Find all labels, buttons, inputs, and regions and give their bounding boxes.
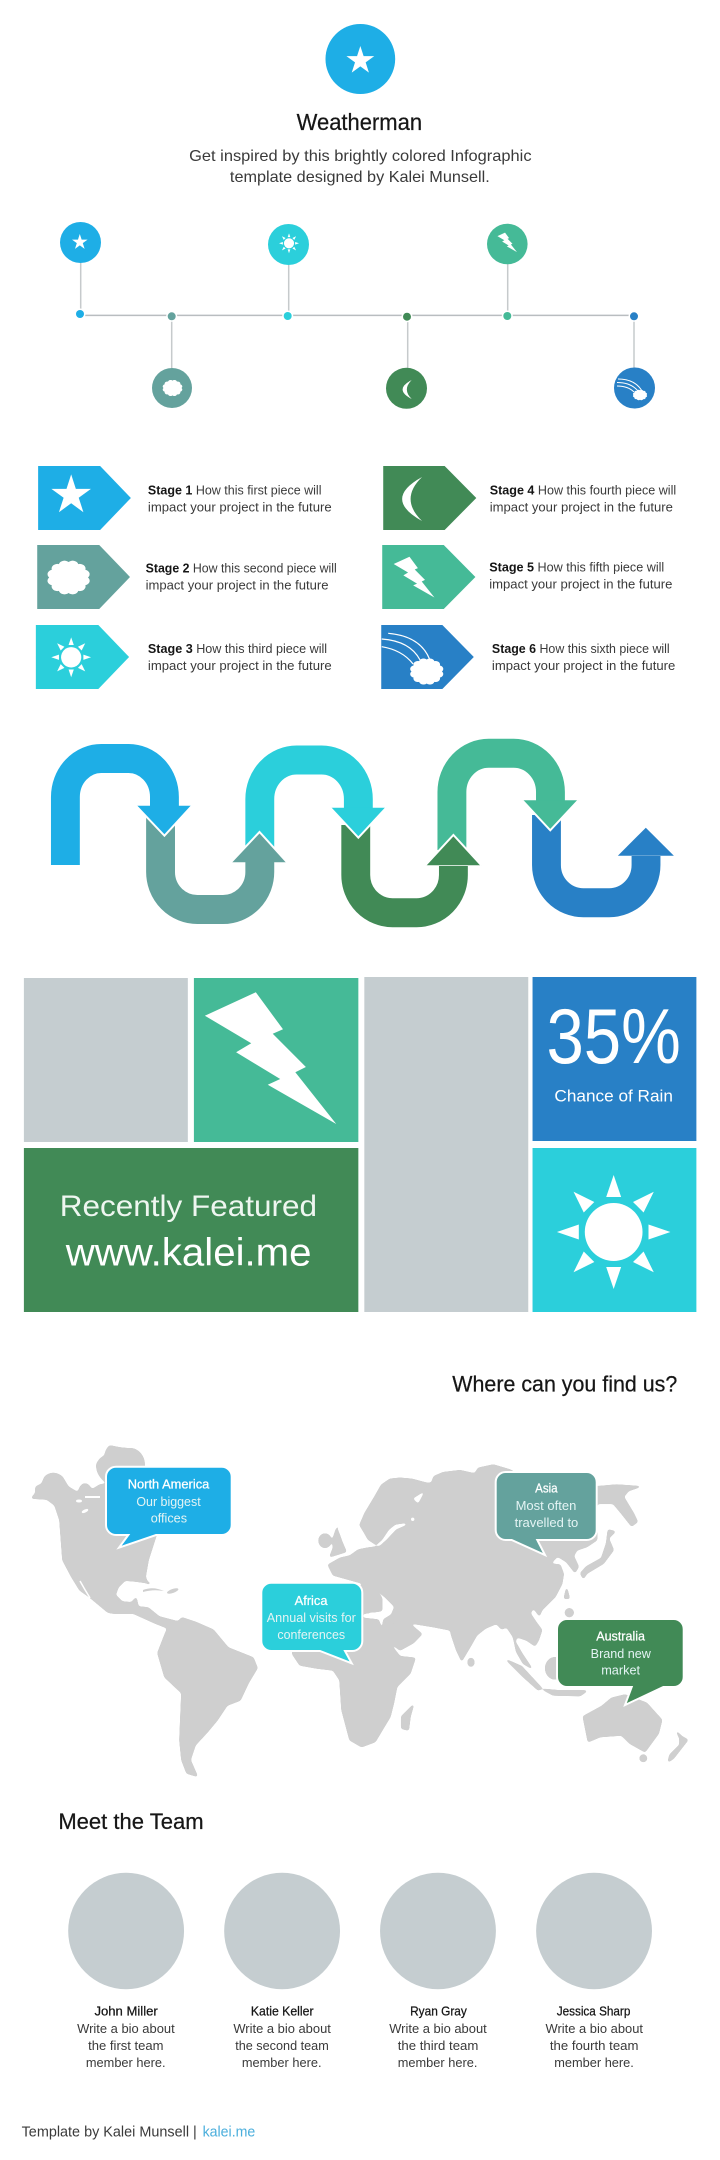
- timeline icon: moon: [386, 368, 427, 409]
- callout: Australia: Australia: [596, 1629, 646, 1644]
- team member: Ryan Gray: member here.: [398, 2056, 477, 2070]
- timeline icon: lightning: [487, 224, 528, 264]
- team member: Katie Keller: Katie Keller: [251, 2005, 314, 2019]
- map: Americas: [32, 1474, 257, 1776]
- panel: stage 5: [382, 545, 672, 609]
- panel: stage 4: [383, 466, 676, 530]
- map: Greenland: [97, 1446, 144, 1482]
- timeline icon: cloud: [152, 368, 192, 408]
- timeline: [60, 222, 655, 409]
- callout: Asia: Most often: [516, 1499, 576, 1513]
- heading: meet the team: Meet the Team: [58, 1809, 204, 1834]
- team member: Ryan Gray: [380, 1873, 496, 2070]
- team member: Jessica Sharp: Jessica Sharp: [557, 2005, 630, 2019]
- intro text: Get inspired by this brightly colored Infographic: [189, 148, 532, 165]
- team member: John Miller: the first team: [88, 2039, 164, 2053]
- header icon: star badge: [325, 24, 395, 94]
- team member: Jessica Sharp: Write a bio about: [545, 2022, 644, 2036]
- panel: stage 1: Stage 1 How this first piece will: [148, 483, 322, 498]
- panel: stage 1: impact your project in the future: [148, 500, 332, 514]
- timeline icon: sun: [268, 224, 309, 265]
- team member: Jessica Sharp: the fourth team: [550, 2039, 638, 2053]
- team member: John Miller: member here.: [86, 2056, 166, 2070]
- map: water details: [76, 1497, 414, 1616]
- callout: Africa: [261, 1583, 362, 1663]
- mosaic: chance of rain tile: Chance of Rain: [554, 1087, 673, 1106]
- team member: Ryan Gray: Ryan Gray: [410, 2005, 468, 2019]
- callout: Australia: [557, 1619, 684, 1705]
- title: Weatherman: [297, 109, 422, 135]
- timeline dot 5: [503, 312, 511, 320]
- panel: stage 2: [37, 545, 337, 609]
- arrow 3: cyan: [260, 760, 386, 850]
- timeline icon: comet: [614, 368, 655, 408]
- team member: John Miller: [68, 1873, 184, 2070]
- map: Caribbean islands: [143, 1587, 179, 1595]
- panel: stage 6: [381, 625, 675, 689]
- panel: stage 6: Stage 6 How this sixth piece will: [492, 642, 670, 656]
- serpentine arrow chain: [65, 753, 674, 913]
- mosaic: sun tile: [533, 1148, 696, 1312]
- callout: Asia: Asia: [535, 1480, 558, 1495]
- map: Eurasia and Oceania: [293, 1465, 688, 1762]
- arrow 6: deep blue: [546, 815, 674, 903]
- intro text: [189, 148, 532, 186]
- mosaic: recently featured tile: Recently Featured: [60, 1190, 317, 1223]
- intro text: template designed by Kalei Munsell.: [230, 169, 490, 186]
- team member: Ryan Gray: the third team: [398, 2039, 478, 2053]
- arrow 2: teal: [161, 812, 287, 910]
- panel: stage 2: impact your project in the future: [146, 579, 329, 593]
- mosaic: chance of rain tile: 35%: [546, 994, 681, 1080]
- team member: Katie Keller: member here.: [242, 2056, 322, 2070]
- arrow 1: blue: [65, 758, 192, 865]
- footer credit: kalei.me: [203, 2125, 255, 2141]
- team member: Katie Keller: [224, 1873, 340, 2070]
- heading: where can you find us: Where can you find us?: [452, 1372, 677, 1397]
- panel: stage 4: impact your project in the future: [490, 500, 673, 514]
- mosaic: image placeholder left: [24, 978, 188, 1142]
- timeline dot 1: [76, 310, 84, 318]
- team member: John Miller: John Miller: [94, 2005, 158, 2019]
- mosaic: image placeholder tall: [364, 977, 528, 1312]
- team member: Katie Keller: the second team: [235, 2039, 329, 2053]
- callout: Africa: Annual visits for: [267, 1611, 356, 1625]
- panel: stage 3: [36, 625, 332, 689]
- team member: Ryan Gray: Write a bio about: [389, 2022, 487, 2036]
- arrow 5: mint: [452, 753, 578, 850]
- callout: North America: [106, 1467, 232, 1548]
- timeline icon: star: [60, 222, 101, 263]
- panel: stage 2: Stage 2 How this second piece will: [146, 561, 337, 575]
- panel: stage 3: impact your project in the future: [148, 659, 332, 673]
- callout: North America: North America: [128, 1477, 210, 1492]
- callout: Asia: travelled to: [515, 1516, 578, 1530]
- callout: Asia: [496, 1472, 597, 1555]
- timeline dot 4: [403, 313, 411, 321]
- panel: stage 5: impact your project in the future: [489, 578, 672, 592]
- panel: stage 5: Stage 5 How this fifth piece will: [489, 561, 664, 575]
- team member: John Miller: Write a bio about: [77, 2022, 175, 2036]
- team member: Jessica Sharp: [536, 1873, 652, 2070]
- callout: North America: Our biggest: [136, 1495, 201, 1509]
- callout: Africa: Africa: [295, 1593, 328, 1608]
- callout: North America: offices: [151, 1512, 187, 1526]
- panel: stage 6: impact your project in the future: [492, 659, 675, 673]
- callout: Australia: Brand new: [591, 1647, 652, 1661]
- footer credit: Template by Kalei Munsell |: [22, 2125, 197, 2141]
- panel: stage 1: [38, 466, 332, 530]
- timeline dot 2: [168, 312, 176, 320]
- team member: Katie Keller: Write a bio about: [233, 2022, 331, 2036]
- callout: Africa: conferences: [277, 1628, 345, 1642]
- panel: stage 4: Stage 4 How this fourth piece will: [490, 483, 676, 498]
- callout: Australia: market: [601, 1664, 641, 1678]
- team member: Jessica Sharp: member here.: [554, 2056, 634, 2070]
- mosaic: lightning tile: [194, 978, 358, 1142]
- timeline dot 6: [630, 312, 638, 320]
- panel: stage 3: Stage 3 How this third piece will: [148, 642, 327, 656]
- timeline dot 3: [284, 312, 292, 320]
- mosaic: recently featured tile: [24, 1148, 358, 1312]
- mosaic: chance of rain tile: [533, 977, 696, 1141]
- world map: [32, 1446, 688, 1776]
- arrow 4: dark green: [356, 825, 481, 913]
- mosaic: recently featured tile: www.kalei.me: [65, 1231, 312, 1274]
